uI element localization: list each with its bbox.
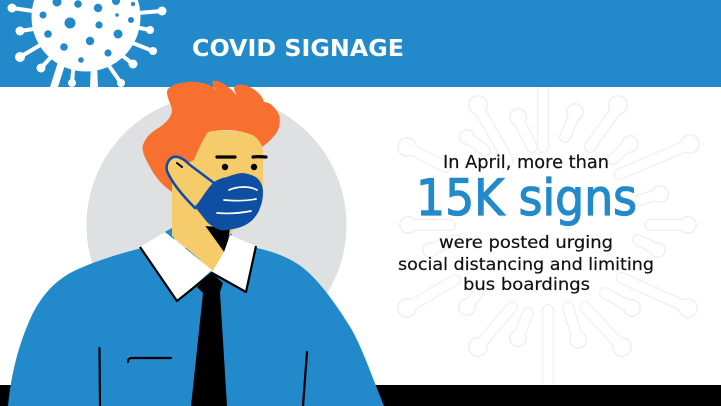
description: were posted urging — [439, 233, 613, 253]
intro line: In April, more than — [443, 153, 609, 173]
shirt lines — [100, 348, 307, 406]
big number: 15K signs — [416, 169, 637, 227]
description — [398, 233, 654, 295]
neck shadow — [205, 226, 230, 252]
tie — [191, 273, 227, 406]
hair — [142, 81, 280, 192]
ear and mask strap — [167, 157, 218, 208]
description: bus boardings — [463, 275, 590, 295]
shirt — [8, 248, 384, 406]
collar outlines — [140, 246, 256, 301]
icon: virus in header — [8, 0, 166, 87]
figure: man wearing mask — [8, 81, 384, 406]
background virus watermark — [397, 87, 700, 385]
collar blue inner — [163, 228, 232, 245]
neck and face — [172, 130, 263, 272]
neck over collar — [172, 222, 224, 270]
collar left — [140, 232, 212, 301]
mask pleats — [217, 187, 257, 213]
collar right — [212, 235, 256, 292]
eyebrows — [217, 155, 266, 159]
bottom black band — [0, 385, 721, 406]
eyes — [222, 164, 257, 170]
description: social distancing and limiting — [398, 255, 654, 275]
header band — [0, 0, 721, 87]
mask — [195, 173, 263, 230]
grey circle behind figure — [86, 95, 346, 355]
title: COVID SIGNAGE — [192, 36, 404, 62]
ear detail — [177, 163, 182, 167]
text block: statistic — [398, 153, 654, 295]
